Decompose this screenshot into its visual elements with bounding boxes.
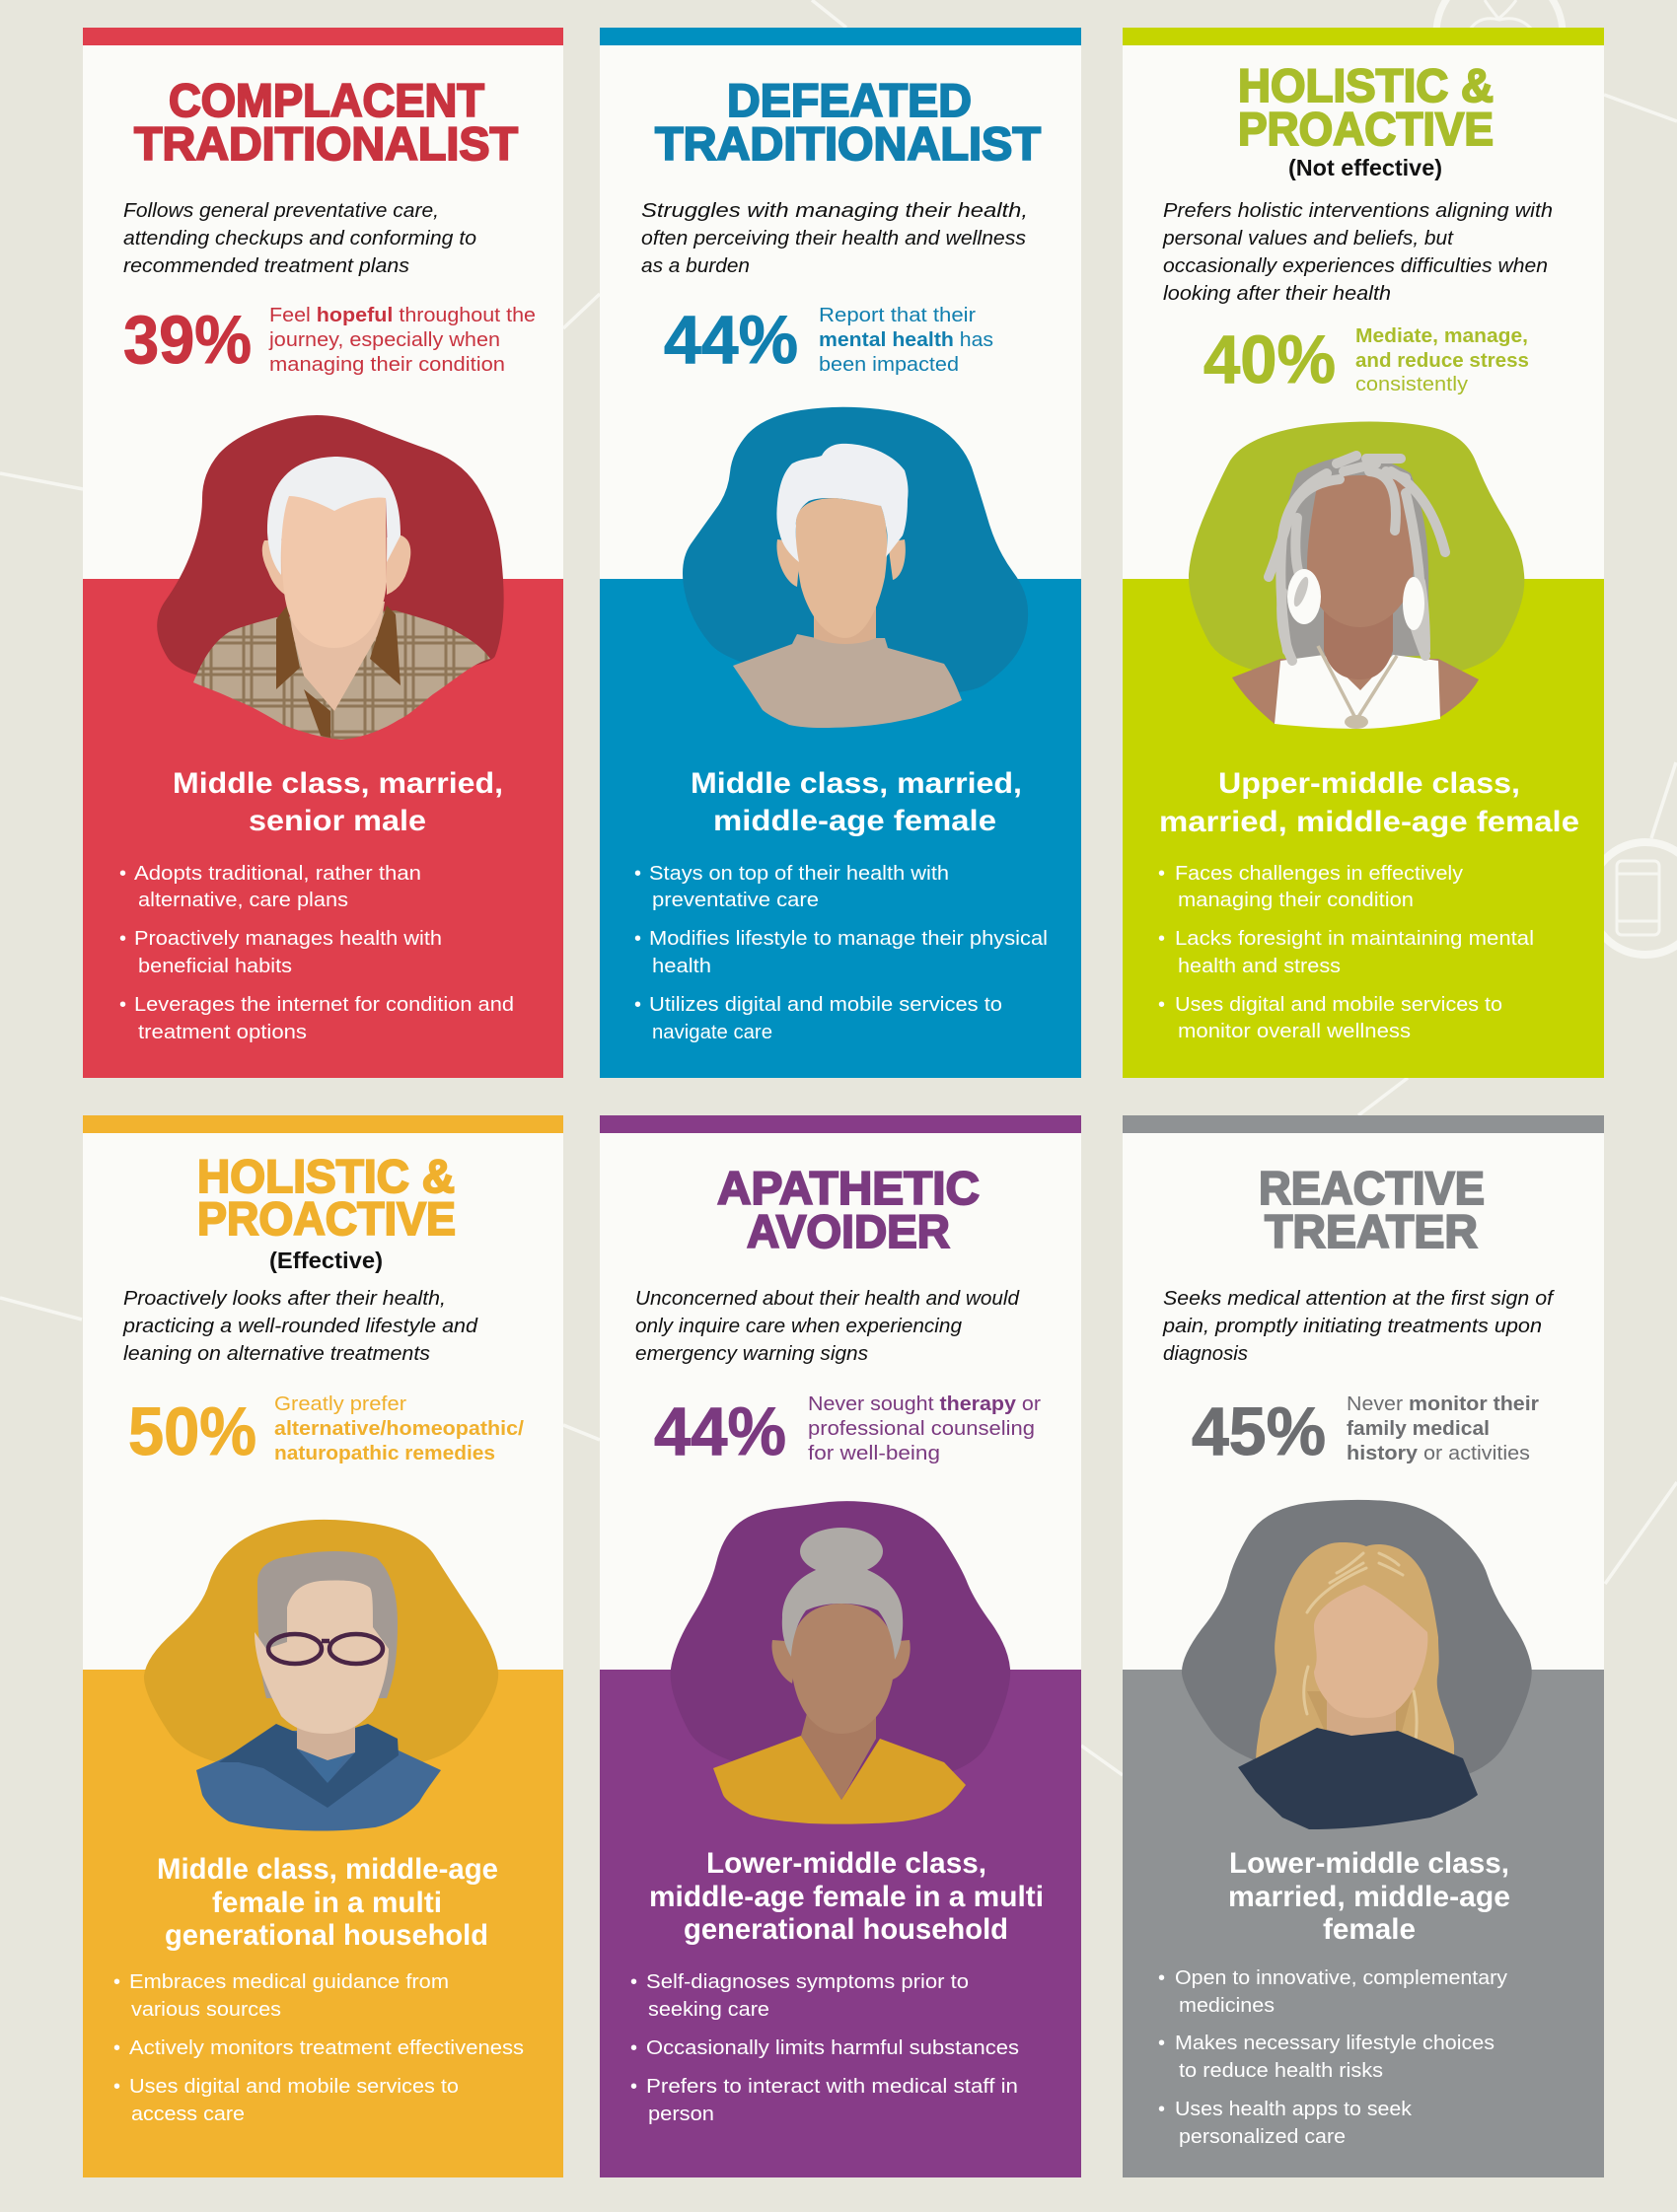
stat: 44%: 44% <box>664 302 798 378</box>
description: Unconcerned about their health and would <box>635 1288 1020 1310</box>
demographic label: Middle class, married, <box>173 767 503 800</box>
bullet list: health and stress <box>1178 956 1341 977</box>
description <box>635 1288 1020 1365</box>
demographic label: Middle class, middle-age <box>157 1853 498 1886</box>
description: practicing a well-rounded lifestyle and <box>122 1316 478 1337</box>
bullet list: to reduce health risks <box>1179 2060 1383 2082</box>
bullet list: Leverages the internet for condition and <box>134 994 514 1016</box>
bullet list: • <box>630 2037 637 2059</box>
bullet list: Modifies lifestyle to manage their physical <box>649 928 1048 950</box>
stat: 50%: Greatly prefer <box>274 1393 406 1415</box>
bullet list: health <box>652 956 711 977</box>
stat: 44% <box>664 302 993 378</box>
demographic label: Upper-middle class, <box>1218 767 1520 800</box>
description: Prefers holistic interventions aligning with <box>1163 200 1553 222</box>
panel: defeated traditionalist <box>600 28 1081 1078</box>
bullet list: navigate care <box>652 1022 772 1043</box>
stat: 45%: family medical <box>1347 1418 1490 1440</box>
bullet list: • <box>113 2076 120 2098</box>
description <box>1162 200 1553 305</box>
demographic label: married, middle-age female <box>1159 806 1579 838</box>
description: attending checkups and conforming to <box>123 228 476 250</box>
title: defeated traditionalist: DEFEATED <box>727 74 972 126</box>
title: defeated traditionalist: TRADITIONALIST <box>655 117 1041 170</box>
demographic label <box>691 767 1022 837</box>
bullet list: Stays on top of their health with <box>649 863 949 885</box>
stat: 44%: Never sought therapy or <box>808 1393 1041 1415</box>
demographic label: Lower-middle class, <box>706 1847 986 1880</box>
demographic label: Middle class, married, <box>691 767 1022 800</box>
demographic label: senior male <box>249 805 426 837</box>
description: Seeks medical attention at the first sign of <box>1163 1288 1556 1310</box>
stat: 39% <box>123 302 536 378</box>
description: diagnosis <box>1163 1343 1248 1365</box>
stat: 44% <box>654 1393 1041 1469</box>
portrait: middle-age female, grey bun <box>671 1501 1010 1824</box>
stat: 44%: Report that their <box>819 305 976 326</box>
description: pain, promptly initiating treatments upon <box>1162 1316 1542 1337</box>
stat: 50%: 50% <box>128 1393 256 1469</box>
bullet list: • <box>630 1971 637 1993</box>
bullet list: Uses health apps to seek <box>1175 2099 1413 2120</box>
stat: 39%: Feel hopeful throughout the <box>269 305 536 326</box>
bullet list: • <box>634 994 641 1016</box>
panel: reactive treater <box>1123 1115 1604 2177</box>
bullet list: Prefers to interact with medical staff in <box>646 2076 1018 2098</box>
stat: 40% <box>1203 321 1529 397</box>
bullet list: alternative, care plans <box>138 890 348 911</box>
title: apathetic avoider: APATHETIC <box>717 1162 980 1214</box>
bullet list: person <box>648 2104 714 2125</box>
stat: 45% <box>1192 1393 1539 1469</box>
stat: 44%: for well-being <box>808 1443 940 1464</box>
demographic label: middle-age female <box>713 805 996 837</box>
bullet list: Utilizes digital and mobile services to <box>649 994 1002 1016</box>
demographic label: female <box>1323 1913 1416 1946</box>
stat: 44%: been impacted <box>819 354 959 376</box>
bullet list: Adopts traditional, rather than <box>134 863 421 885</box>
subtitle: (Effective) <box>269 1248 383 1273</box>
title: apathetic avoider <box>717 1162 980 1257</box>
stat: 50%: alternative/homeopathic/ <box>274 1418 524 1440</box>
title: holistic and proactive: PROACTIVE <box>197 1192 456 1245</box>
bullet list: Open to innovative, complementary <box>1175 1967 1507 1989</box>
stat: 39%: 39% <box>123 302 252 378</box>
description: often perceiving their health and wellness <box>641 228 1026 250</box>
bullet list <box>119 863 514 1043</box>
description: occasionally experiences difficulties when <box>1163 255 1548 277</box>
demographic label: generational household <box>165 1919 488 1952</box>
title: holistic and proactive: PROACTIVE <box>1238 103 1494 155</box>
stat: 45%: Never monitor their <box>1347 1393 1539 1415</box>
bullet list: personalized care <box>1179 2126 1346 2148</box>
bullet list: Proactively manages health with <box>134 928 442 950</box>
bullet list: Faces challenges in effectively <box>1175 863 1463 885</box>
title: holistic and proactive <box>197 1150 456 1245</box>
description <box>641 200 1028 277</box>
title: complacent traditionalist: COMPLACENT <box>169 74 484 126</box>
bullet list: • <box>630 2076 637 2098</box>
description: leaning on alternative treatments <box>123 1343 430 1365</box>
icon: apple in ring <box>1436 0 1563 97</box>
title: reactive treater: TREATER <box>1265 1205 1478 1257</box>
stat: 40%: 40% <box>1203 321 1336 397</box>
description: Proactively looks after their health, <box>123 1288 446 1310</box>
bullet list: various sources <box>131 1999 281 2021</box>
stat: 40%: Mediate, manage, <box>1355 325 1528 347</box>
description: only inquire care when experiencing <box>635 1316 962 1337</box>
bullet list <box>1158 863 1534 1042</box>
bullet list: • <box>113 1971 120 1993</box>
title: reactive treater <box>1259 1162 1485 1257</box>
description: recommended treatment plans <box>123 255 409 277</box>
bullet list: Occasionally limits harmful substances <box>646 2037 1019 2059</box>
portrait: upper-middle-class female, grey locs <box>1189 422 1524 729</box>
stat: 50% <box>128 1393 524 1469</box>
description: as a burden <box>641 255 750 277</box>
icon: mobile phone in ring <box>1589 842 1677 955</box>
title: defeated traditionalist <box>655 74 1041 170</box>
bullet list: • <box>634 928 641 950</box>
demographic label: generational household <box>684 1913 1008 1946</box>
bullet list: medicines <box>1179 1995 1275 2017</box>
bullet list: • <box>1158 1967 1165 1989</box>
portrait: middle-age female, white hair <box>683 407 1028 728</box>
description <box>1162 1288 1556 1365</box>
bullet list: • <box>119 928 126 950</box>
bullet list: • <box>113 2037 120 2059</box>
title: holistic and proactive: HOLISTIC & <box>1238 59 1494 111</box>
stat: 40%: consistently <box>1355 374 1468 395</box>
bullet list <box>1158 1967 1507 2148</box>
title: apathetic avoider: AVOIDER <box>747 1205 950 1257</box>
stat: 44%: mental health has <box>819 329 993 351</box>
bullet list: • <box>1158 928 1165 950</box>
bullet list: managing their condition <box>1178 890 1414 911</box>
stat: 39%: managing their condition <box>269 354 505 376</box>
bullet list: Uses digital and mobile services to <box>1175 994 1502 1016</box>
description: personal values and beliefs, but <box>1162 228 1454 250</box>
title: complacent traditionalist: TRADITIONALIST <box>134 117 518 170</box>
demographic label <box>1159 767 1579 838</box>
demographic label <box>1228 1847 1510 1946</box>
portrait: middle-age female, glasses <box>144 1520 498 1831</box>
bullet list: seeking care <box>648 1999 769 2021</box>
portrait: senior male <box>157 415 504 740</box>
stat: 39%: journey, especially when <box>268 329 500 351</box>
bullet list: • <box>1158 863 1165 885</box>
bullet list: Actively monitors treatment effectiveness <box>129 2037 524 2059</box>
bullet list: beneficial habits <box>138 956 292 977</box>
bullet list <box>113 1971 524 2125</box>
bullet list: monitor overall wellness <box>1178 1021 1411 1042</box>
description: Follows general preventative care, <box>123 200 439 222</box>
bullet list: • <box>119 994 126 1016</box>
bullet list: • <box>1158 2033 1165 2054</box>
bullet list: treatment options <box>138 1022 307 1043</box>
bullet list: Makes necessary lifestyle choices <box>1175 2033 1495 2054</box>
bullet list: • <box>1158 994 1165 1016</box>
bullet list: Self-diagnoses symptoms prior to <box>646 1971 969 1993</box>
bullet list: Uses digital and mobile services to <box>129 2076 459 2098</box>
demographic label: Lower-middle class, <box>1229 1847 1509 1880</box>
title: complacent traditionalist <box>134 74 518 170</box>
bullet list: access care <box>131 2104 245 2125</box>
demographic label <box>649 1847 1044 1946</box>
stat: 45%: history or activities <box>1347 1443 1530 1464</box>
bullet list <box>634 863 1048 1043</box>
description <box>122 1288 478 1365</box>
stat: 50%: naturopathic remedies <box>274 1443 495 1464</box>
subtitle: (Not effective) <box>1288 155 1442 180</box>
description: looking after their health <box>1163 283 1391 305</box>
bullet list: Lacks foresight in maintaining mental <box>1175 928 1534 950</box>
bullet list: • <box>1158 2099 1165 2120</box>
stat: 44%: 44% <box>654 1393 786 1469</box>
title: reactive treater: REACTIVE <box>1259 1162 1485 1214</box>
bullet list: • <box>119 863 126 885</box>
panel: complacent traditionalist <box>83 28 563 1078</box>
demographic label: middle-age female in a multi <box>649 1881 1044 1913</box>
panel: apathetic avoider <box>600 1115 1081 2177</box>
panel: holistic and proactive, effective <box>83 1115 563 2177</box>
panel: holistic and proactive, not effective <box>1123 28 1604 1078</box>
description: emergency warning signs <box>635 1343 868 1365</box>
description <box>123 200 476 277</box>
stat: 45%: 45% <box>1192 1393 1326 1469</box>
title: holistic and proactive <box>1238 59 1494 155</box>
demographic label <box>157 1853 498 1952</box>
bullet list <box>630 1971 1019 2125</box>
stat: 40%: and reduce stress <box>1355 350 1529 372</box>
title: holistic and proactive: HOLISTIC & <box>197 1150 455 1202</box>
demographic label: married, middle-age <box>1228 1881 1510 1913</box>
demographic label <box>173 767 503 837</box>
portrait: middle-age female, blonde hair <box>1182 1500 1532 1829</box>
bullet list: Embraces medical guidance from <box>129 1971 449 1993</box>
stat: 44%: professional counseling <box>808 1418 1035 1440</box>
demographic label: female in a multi <box>212 1887 442 1919</box>
bullet list: preventative care <box>652 890 819 911</box>
bullet list: • <box>634 863 641 885</box>
description: Struggles with managing their health, <box>641 200 1028 222</box>
